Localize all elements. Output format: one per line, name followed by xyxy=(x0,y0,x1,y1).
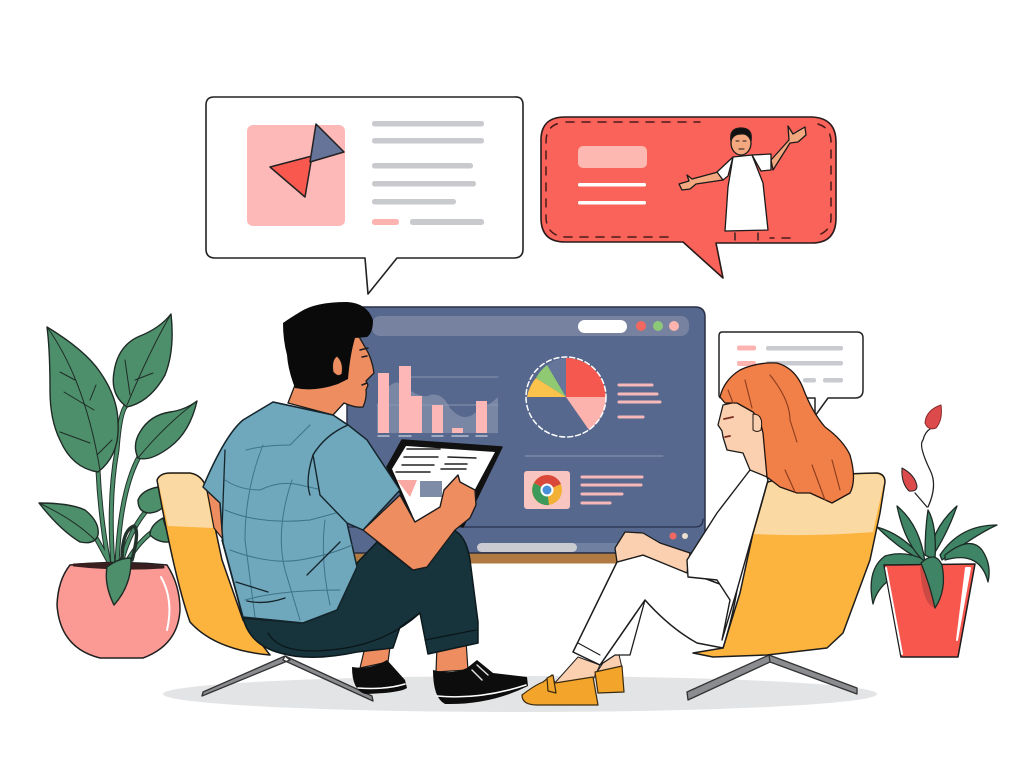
plant: left xyxy=(39,314,197,658)
small speech bubble xyxy=(719,332,863,416)
chair: right xyxy=(687,473,885,700)
floor shadow xyxy=(163,676,877,712)
icon: browser logo xyxy=(524,471,570,509)
document thumbnail xyxy=(247,124,345,226)
shoes xyxy=(522,666,624,705)
legs xyxy=(553,555,737,685)
hair xyxy=(720,363,854,503)
leaves xyxy=(39,314,197,543)
pie legend lines xyxy=(619,385,660,417)
document text lines xyxy=(372,121,484,225)
neck and face xyxy=(288,335,374,415)
shirt sleeve xyxy=(313,425,400,530)
pie chart xyxy=(526,357,606,437)
hair xyxy=(283,302,373,389)
speech bubble: document xyxy=(206,97,523,294)
flower stems and buds xyxy=(902,405,941,507)
person: man seated with tablet xyxy=(203,302,528,704)
ear xyxy=(332,356,342,376)
person: woman seated xyxy=(522,363,885,705)
face and neck xyxy=(718,400,767,477)
presenter figure xyxy=(679,126,806,240)
chair: left xyxy=(157,473,373,701)
shirt xyxy=(203,402,400,623)
forearm and hand xyxy=(615,532,690,573)
window top bar xyxy=(372,316,689,336)
bar chart xyxy=(377,366,498,436)
legs xyxy=(222,530,478,672)
pot xyxy=(57,562,180,658)
front leaf xyxy=(106,558,131,605)
stems xyxy=(96,405,155,565)
leaves xyxy=(871,506,997,604)
speech bubble: presenter xyxy=(541,117,836,278)
plant: right xyxy=(871,405,997,657)
arm and hand xyxy=(363,475,476,570)
text lines xyxy=(582,477,642,503)
pot xyxy=(884,564,975,657)
far arm xyxy=(207,490,225,542)
tablet xyxy=(387,440,502,527)
shoes xyxy=(352,660,528,704)
wooden console xyxy=(355,540,735,564)
shirt xyxy=(687,463,768,640)
front leaf xyxy=(921,557,943,608)
dashboard monitor xyxy=(347,307,705,553)
